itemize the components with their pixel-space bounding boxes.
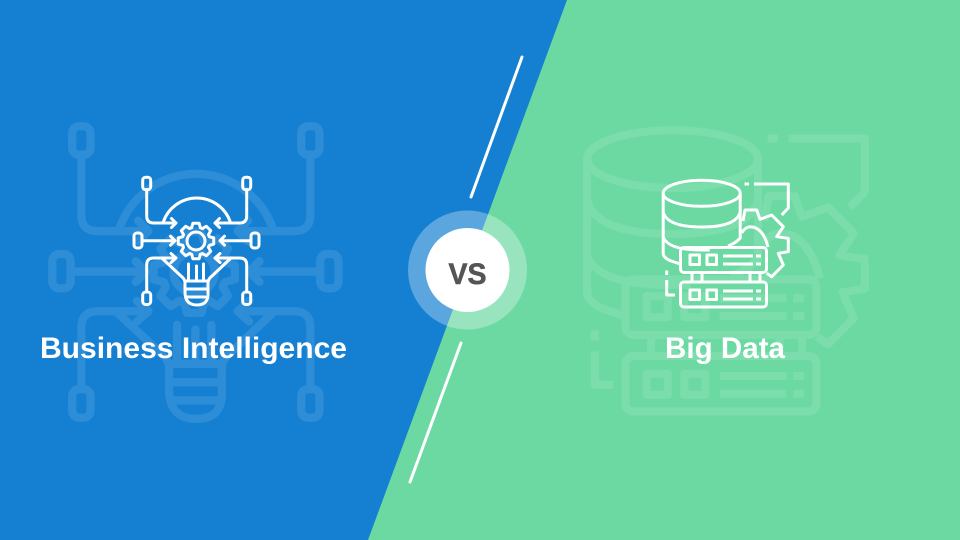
badge text: VS <box>448 258 486 291</box>
watermark icon: big data <box>587 130 865 412</box>
heading: Business Intelligence: Business Intelligence <box>40 332 347 365</box>
icon: light bulb with gear and arrows <box>134 177 259 305</box>
watermark icon: business intelligence <box>52 126 339 419</box>
badge inner circle <box>426 228 510 312</box>
badge outer ring <box>408 210 527 330</box>
icon: database, servers and gear <box>663 180 788 307</box>
divider line: lower <box>410 343 461 482</box>
heading: Big Data: Big Data <box>665 332 785 365</box>
divider line: upper <box>471 57 522 197</box>
background: green diagonal panel <box>368 0 960 540</box>
vs badge <box>408 210 527 330</box>
